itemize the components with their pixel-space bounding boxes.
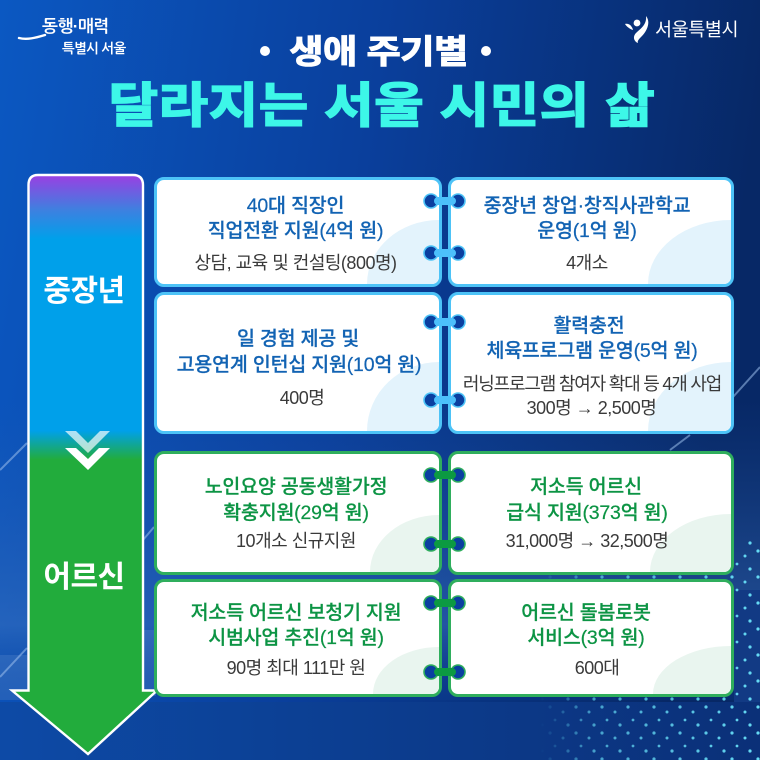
bullet left: [260, 46, 270, 56]
panel: 저소득 어르신 급식: [448, 451, 734, 575]
panel: 노인요양: [154, 451, 442, 575]
panel: 중장년 창업·창직사관학교: 중장년 창업·창직사관학교: [484, 195, 690, 217]
panel: 활력충전: 체육프로그램 운영(5억 원): [486, 340, 698, 362]
panel: 저소득 어르신 급식: 급식 지원(373억 원): [506, 502, 668, 524]
panel: 활력충전: 300명 → 2,500명: [527, 398, 656, 418]
panel: 돌봄로봇: 서비스(3억 원): [527, 627, 645, 649]
panel: 활력충전: [448, 292, 734, 434]
panel: 40대 직장인: 직업전환 지원(4억 원): [208, 220, 383, 242]
panel: 중장년 창업·창직사관학교: 운영(1억 원): [537, 220, 637, 242]
panel: 일 경험 제공: 일 경험 제공 및: [237, 328, 359, 350]
main title: 달라지는 서울 시민의 삶: [109, 80, 655, 133]
bullet right: [481, 46, 491, 56]
panel: 일 경험 제공: [154, 292, 442, 434]
panel: 보청기: [154, 579, 442, 697]
panel: 40대 직장인: 상담, 교육 및 컨설팅(800명): [194, 253, 397, 273]
logo: 서울특별시: 서울특별시: [655, 19, 738, 40]
panel: 노인요양: 노인요양 공동생활가정: [205, 476, 387, 498]
panel: 노인요양: 확충지원(29억 원): [223, 502, 369, 524]
panel: 활력충전: 활력충전: [554, 315, 624, 337]
panel: 저소득 어르신 급식: 31,000명 → 32,500명: [506, 531, 668, 551]
panel: 일 경험 제공: 고용연계 인턴십 지원(10억 원): [177, 354, 421, 376]
timeline arrow: [8, 174, 156, 756]
panel: 40대 직장인: [154, 177, 442, 287]
panel: 노인요양: 10개소 신규지원: [236, 531, 356, 551]
panel: 중장년 창업·창직사관학교: [448, 177, 734, 287]
panel: 활력충전: 러닝프로그램 참여자 확대 등 4개 사업: [463, 374, 721, 394]
panel: 보청기: 시범사업 추진(1억 원): [208, 627, 384, 649]
panel: 일 경험 제공: 400명: [280, 388, 324, 408]
logo: 서울특별시: [625, 16, 738, 43]
label: 중장년: 중장년: [43, 275, 125, 308]
icon: seoul symbol: [625, 16, 648, 43]
panel: 중장년 창업·창직사관학교: 4개소: [566, 253, 608, 273]
subtitle heading: 생애 주기별: [289, 33, 468, 70]
panel: 40대 직장인: 40대 직장인: [247, 195, 344, 217]
logo: 동행 매력 특별시 서울: 동행·매력: [42, 17, 109, 36]
panel: 저소득 어르신 급식: 저소득 어르신: [530, 476, 642, 498]
panel: 보청기: 90명 최대 111만 원: [227, 658, 365, 678]
logo: 동행 매력 특별시 서울: 특별시 서울: [62, 41, 126, 56]
panel: 돌봄로봇: 어르신 돌봄로봇: [521, 602, 651, 624]
panel: 돌봄로봇: [448, 579, 734, 697]
panel: 보청기: 저소득 어르신 보청기 지원: [191, 602, 401, 624]
panel: 돌봄로봇: 600대: [575, 658, 619, 678]
label: 어르신: 어르신: [43, 561, 125, 594]
binder rings: [423, 193, 466, 680]
logo: 동행 매력 특별시 서울: [18, 17, 126, 56]
logo swoosh: [18, 34, 46, 40]
